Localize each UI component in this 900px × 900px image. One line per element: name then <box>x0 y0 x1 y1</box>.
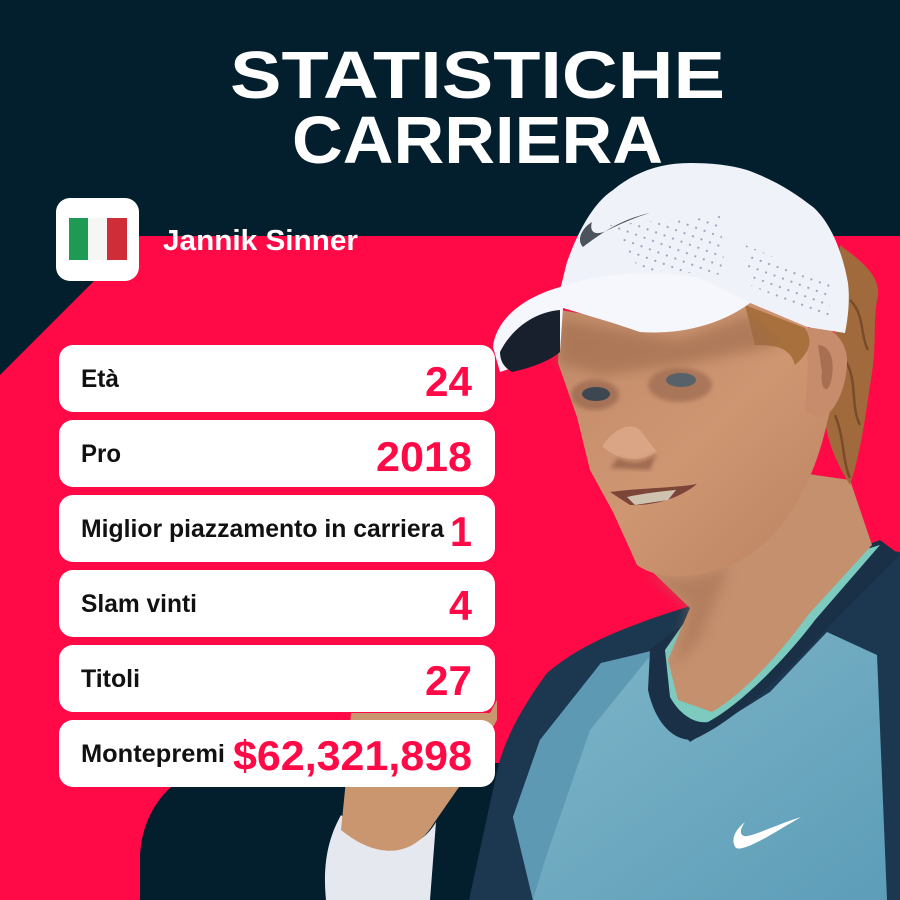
icon: cap swoosh <box>580 213 650 247</box>
icon: Italian flag <box>56 198 139 281</box>
nose <box>603 426 657 459</box>
neck shadow <box>640 565 730 668</box>
stat row: Pro: 2018 <box>376 433 472 480</box>
shirt body <box>513 632 887 900</box>
title: CARRIERA <box>292 103 663 178</box>
cap crown <box>560 163 849 333</box>
stat row: Pro <box>59 420 495 487</box>
cap underside <box>500 310 560 372</box>
shirt fold shading <box>513 650 655 900</box>
stat row: Età: 24 <box>425 358 473 405</box>
cap perforations <box>610 215 830 320</box>
stat row: Età <box>59 345 495 412</box>
face <box>558 303 845 576</box>
stat row: Miglior piazzamento in carriera: Miglior piazzamento in carriera <box>81 515 445 543</box>
player photo illustration <box>325 163 900 900</box>
stat row: Montepremi: Montepremi <box>81 740 225 768</box>
stat row: Slam vinti: Slam vinti <box>81 590 197 618</box>
mouth <box>610 484 697 505</box>
hair curls <box>835 300 868 478</box>
stat row: Miglior piazzamento in carriera: 1 <box>450 508 472 555</box>
stat row: Slam vinti: 4 <box>449 582 473 629</box>
neck <box>640 470 872 712</box>
title <box>230 38 725 178</box>
shirt sleeve and dark panels <box>469 548 900 900</box>
red background shape <box>0 236 900 900</box>
ear <box>805 326 847 418</box>
stat row: Titoli: Titoli <box>81 665 140 693</box>
stat row: Montepremi <box>59 720 495 787</box>
stat row: Pro: Pro <box>81 440 121 468</box>
title: STATISTICHE <box>230 38 725 113</box>
cap brim <box>493 273 750 372</box>
eye sockets <box>571 380 619 410</box>
player name: Jannik Sinner <box>163 225 358 257</box>
front hair <box>745 305 809 365</box>
icon: shirt swoosh <box>733 817 801 849</box>
stat row: Titoli <box>59 645 495 712</box>
wristband <box>325 815 436 900</box>
brow and cap shadow <box>558 315 780 375</box>
stat row: Slam vinti <box>59 570 495 637</box>
stat row: Titoli: 27 <box>425 657 472 704</box>
stat row: Montepremi: $62,321,898 <box>233 732 472 779</box>
hand <box>341 700 497 851</box>
stat row: Età: Età <box>81 365 119 393</box>
stat row: Miglior piazzamento in carriera <box>59 495 495 562</box>
hair back <box>825 245 878 485</box>
collar dark ring <box>648 540 900 740</box>
eyes <box>582 387 610 401</box>
collar teal <box>665 545 880 722</box>
